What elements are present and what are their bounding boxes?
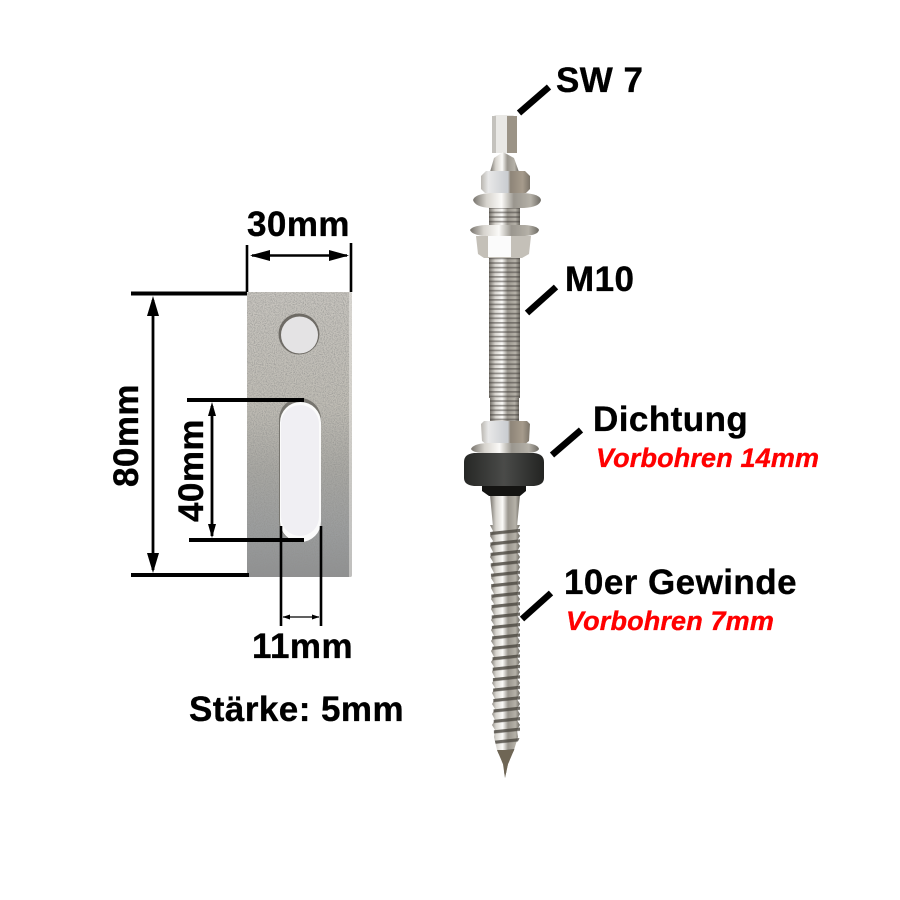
dimension: 80mm height [107, 294, 249, 575]
wood screw thread and tip [490, 525, 520, 778]
dimension: 11mm slot width: 11mm [252, 627, 353, 666]
oblong slot [279, 398, 321, 542]
hanger bolt [464, 115, 544, 778]
label: 10er Gewinde: 10er Gewinde [564, 563, 797, 602]
top washer [473, 193, 541, 208]
panel: mounting plate [247, 292, 352, 577]
label: 10er Gewinde: Vorbohren 7mm [566, 606, 774, 636]
text: thickness: Stärke: 5mm [189, 690, 404, 729]
dimension: 11mm slot width [252, 526, 353, 666]
label: M10 [527, 260, 634, 313]
top nut [481, 171, 530, 193]
label: Dichtung: Vorbohren 14mm [596, 443, 819, 473]
dimension: 30mm width [247, 205, 351, 292]
hex drive tip SW 7 [490, 115, 519, 172]
label: 10er Gewinde [522, 563, 797, 636]
dimension: 80mm height: 80mm [107, 384, 146, 487]
lower washer [471, 443, 539, 453]
metric thread M10 [489, 206, 520, 422]
smooth shank [490, 495, 520, 527]
label: Dichtung: Dichtung [593, 400, 748, 439]
second washer [470, 225, 539, 236]
dimension: 40mm slot length [172, 400, 304, 540]
label: SW 7 [519, 61, 643, 113]
dimension: 30mm width: 30mm [247, 205, 350, 244]
label: Dichtung [552, 400, 819, 473]
label: SW 7: SW 7 [556, 61, 643, 100]
plate body [247, 292, 352, 577]
rubber seal [464, 453, 544, 496]
round hole [278, 314, 320, 354]
dimension: 40mm slot length: 40mm [172, 419, 211, 522]
lower nut [481, 421, 530, 445]
second nut [476, 236, 531, 258]
label: M10: M10 [565, 260, 634, 299]
